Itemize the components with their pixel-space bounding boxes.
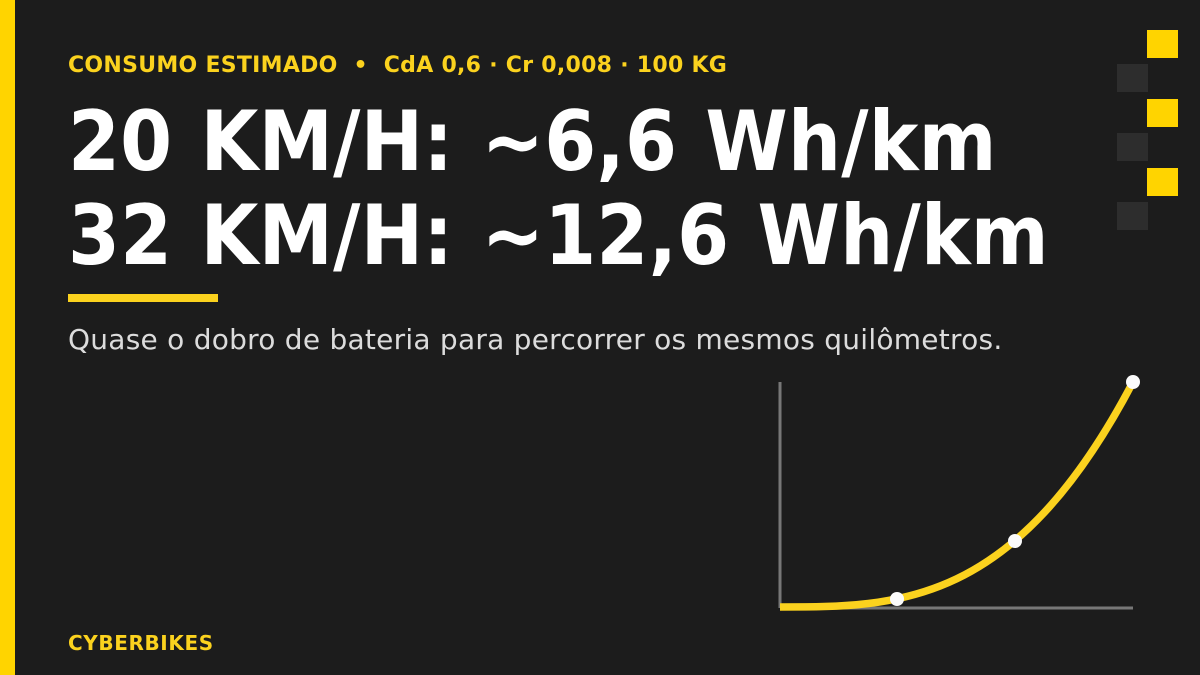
yellow curve (780, 382, 1133, 607)
brand footer: CYBERBIKES (68, 631, 214, 655)
subtitle: Quase o dobro de bateria para percorrer os mesmos quilômetros. (68, 323, 1002, 356)
chart axes (780, 382, 1133, 608)
eyebrow heading: CONSUMO ESTIMADO • CdA 0,6 · Cr 0,008 · 100 KG (68, 53, 727, 78)
title underline (68, 294, 218, 302)
data points (890, 375, 1140, 606)
main title: 20 KM/H: ~6,6 Wh/km 32 KM/H: ~12,6 Wh/km (68, 93, 1049, 284)
line chart: consumption curve (778, 375, 1140, 611)
decorative squares (1117, 30, 1178, 230)
left accent bar (0, 0, 15, 675)
